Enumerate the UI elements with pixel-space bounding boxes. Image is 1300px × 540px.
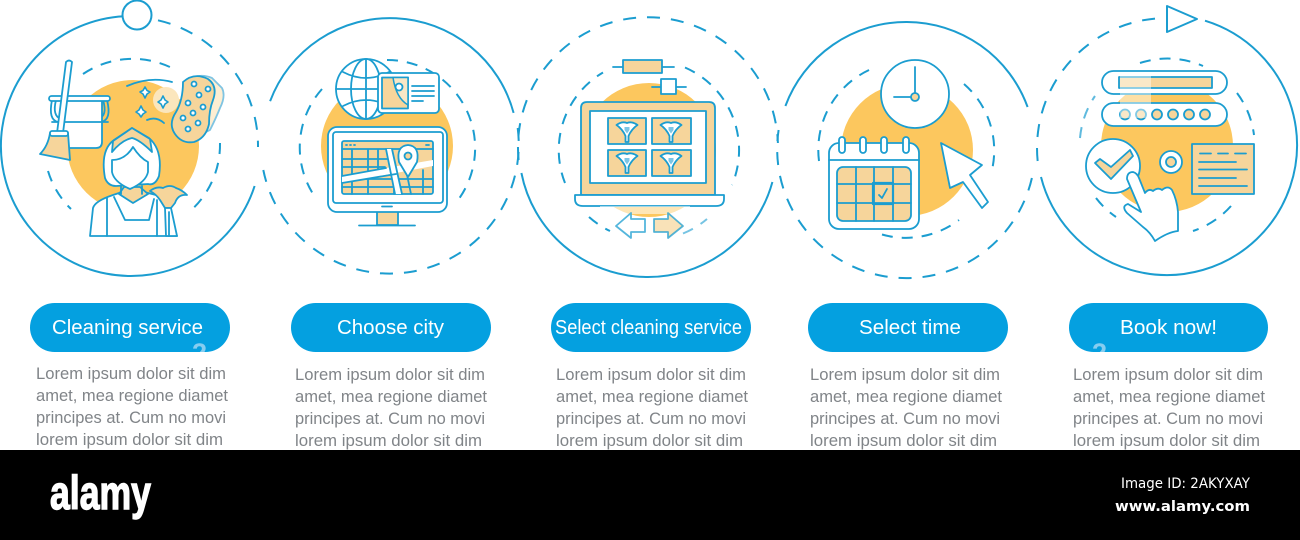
- outer ring: [777, 22, 1032, 278]
- panel: select time illustration: [777, 22, 1032, 278]
- pill: book now: 2: [1092, 338, 1107, 368]
- icon: maid figure: [90, 128, 177, 236]
- icon: map pin: [398, 145, 418, 177]
- icon: laptop with photo grid: [575, 102, 724, 206]
- icon: pointing hand: [1124, 172, 1178, 241]
- image id: Image ID: 2AKYXAY: [1121, 476, 1250, 492]
- icon: left and right arrows: [616, 213, 683, 238]
- inner dashed ring: [48, 59, 220, 213]
- faded band below laptop: [600, 206, 690, 214]
- faded band over fields: [1120, 76, 1151, 118]
- pill: select time: Select time: [859, 317, 961, 339]
- icon: globe: [336, 59, 396, 119]
- text block: column 3: principes at. Cum no movi: [556, 409, 746, 428]
- icon: play triangle: [1167, 6, 1197, 32]
- text block: column 3: Lorem ipsum dolor sit dim: [556, 365, 746, 384]
- outer ring: [263, 18, 519, 274]
- text block: column 2: lorem ipsum dolor sit dim: [295, 431, 482, 450]
- icon: sponge: [172, 76, 224, 142]
- text block: column 2: Lorem ipsum dolor sit dim: [295, 365, 485, 384]
- icon: cursor arrow: [941, 143, 988, 208]
- pill: book now: [1069, 303, 1268, 352]
- icon: password field: [1102, 103, 1227, 126]
- icon: radio target: [1160, 151, 1182, 173]
- icon: clock: [881, 60, 949, 128]
- text block: column 2: [295, 365, 487, 450]
- icon: check circle: [1086, 139, 1140, 193]
- text block: column 1: [36, 364, 228, 449]
- yellow backdrop circle: [1101, 80, 1233, 212]
- panel: select cleaning service illustration: [518, 17, 778, 277]
- icon: calendar: [829, 137, 919, 229]
- text block: column 4: amet, mea regione diamet: [810, 387, 1002, 406]
- pill: cleaning service: 2: [192, 338, 207, 368]
- yellow backdrop circle: [67, 80, 199, 212]
- text block: column 5: Lorem ipsum dolor sit dim: [1073, 365, 1263, 384]
- icon: small connector: [652, 79, 686, 94]
- footer: black watermark bar: [0, 450, 1300, 540]
- icon: feather duster: [150, 186, 187, 236]
- inner dashed ring: [559, 68, 739, 234]
- website url: www.alamy.com: [1115, 499, 1250, 515]
- pill: choose city: Choose city: [337, 317, 444, 339]
- text block: column 5: [1073, 365, 1265, 450]
- panel: cleaning service illustration: [1, 0, 258, 276]
- text block: column 4: [810, 365, 1002, 450]
- pill: select cleaning service: Select cleaning service: [555, 317, 742, 339]
- text block: column 5: principes at. Cum no movi: [1073, 409, 1263, 428]
- text block: column 3: amet, mea regione diamet: [556, 387, 748, 406]
- text block: column 5: amet, mea regione diamet: [1073, 387, 1265, 406]
- pill: cleaning service: Cleaning service: [52, 317, 203, 339]
- outer ring: [518, 17, 778, 277]
- text block: column 1: lorem ipsum dolor sit dim: [36, 430, 223, 449]
- pill: book now: Book now!: [1120, 317, 1217, 339]
- icon: bucket and mop: [40, 60, 110, 160]
- yellow backdrop circle: [321, 80, 453, 212]
- text block: column 4: lorem ipsum dolor sit dim: [810, 431, 997, 450]
- icon: sparkles: [127, 80, 179, 123]
- yellow backdrop circle: [582, 83, 716, 217]
- inner dashed ring: [818, 68, 994, 238]
- pill: select cleaning service: [551, 303, 751, 352]
- icon: document: [1192, 144, 1254, 194]
- pill: cleaning service: [30, 303, 230, 352]
- outer ring: [1037, 19, 1297, 275]
- pill: select time: [808, 303, 1008, 352]
- icon: top connector: [613, 60, 674, 73]
- logo: alamy: alamy: [50, 466, 151, 519]
- icon: monitor with map: [328, 127, 447, 226]
- text block: column 5: lorem ipsum dolor sit dim: [1073, 431, 1260, 450]
- icon: text field: [1102, 71, 1227, 94]
- text block: column 4: principes at. Cum no movi: [810, 409, 1000, 428]
- text block: column 3: [556, 365, 748, 450]
- text block: column 3: lorem ipsum dolor sit dim: [556, 431, 743, 450]
- text block: column 1: principes at. Cum no movi: [36, 408, 226, 427]
- inner dashed ring: [1080, 59, 1254, 231]
- inner dashed ring: [300, 60, 475, 201]
- panel: book now illustration: [1037, 6, 1297, 275]
- icon: id card: [378, 73, 439, 113]
- text block: column 1: Lorem ipsum dolor sit dim: [36, 364, 226, 383]
- pill: choose city: [291, 303, 491, 352]
- icon: progress start circle: [122, 0, 152, 30]
- outer ring: [1, 16, 258, 276]
- panel: choose city illustration: [263, 18, 519, 274]
- yellow backdrop circle: [841, 84, 973, 216]
- text block: column 4: Lorem ipsum dolor sit dim: [810, 365, 1000, 384]
- text block: column 2: principes at. Cum no movi: [295, 409, 485, 428]
- text block: column 1: amet, mea regione diamet: [36, 386, 228, 405]
- text block: column 2: amet, mea regione diamet: [295, 387, 487, 406]
